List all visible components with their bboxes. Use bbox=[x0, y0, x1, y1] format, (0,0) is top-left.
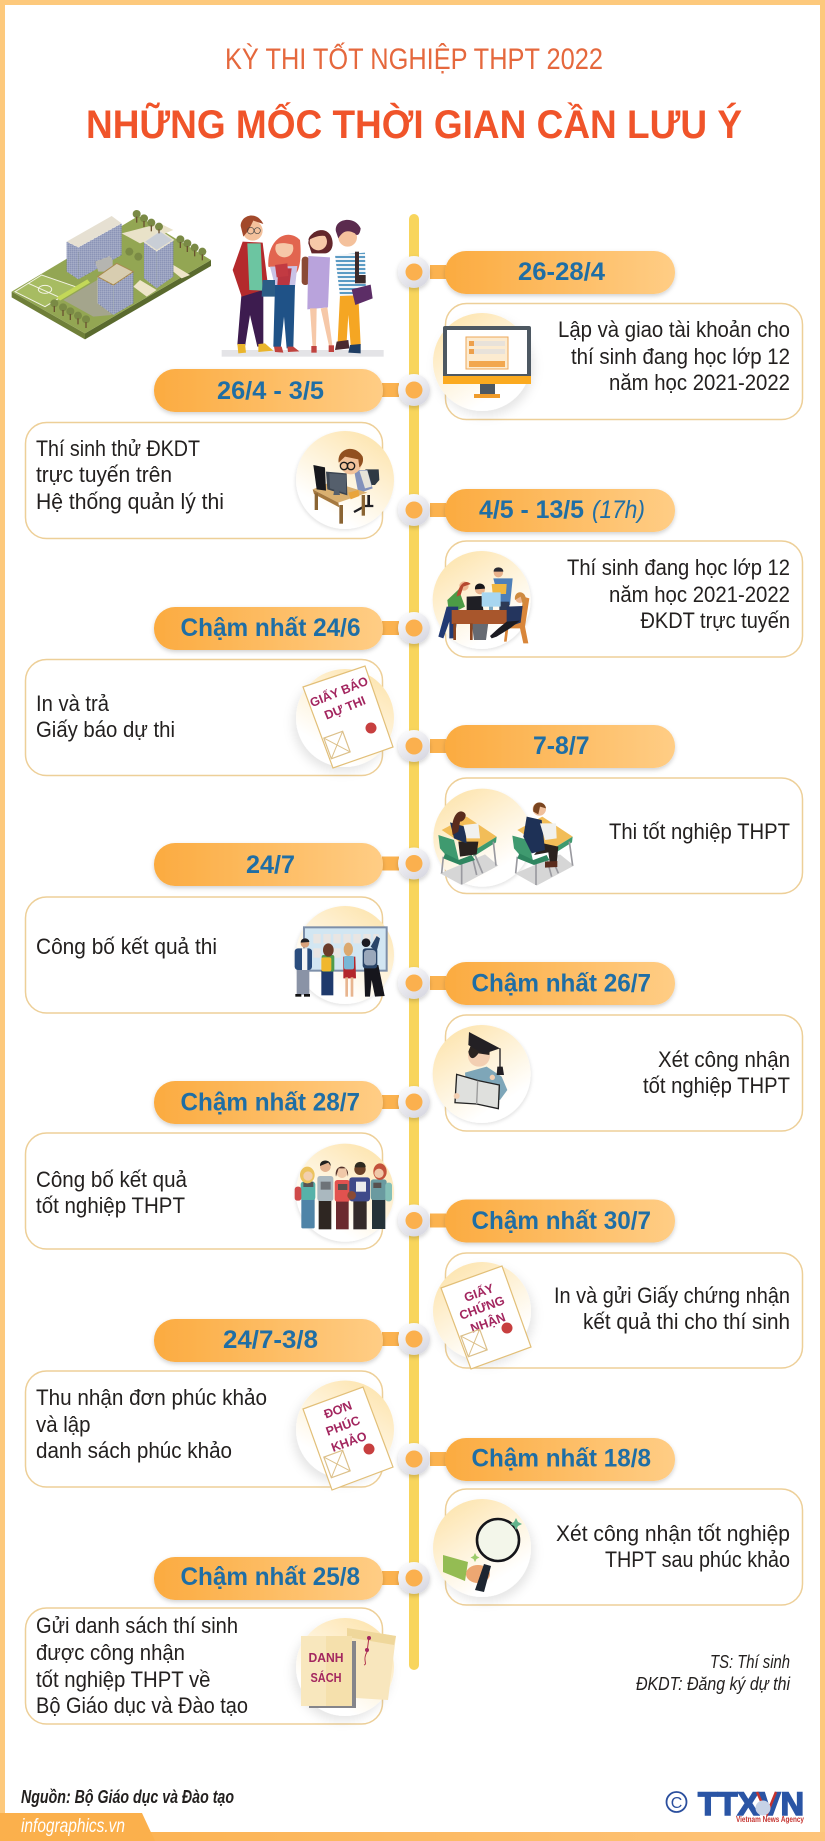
date pill: Chậm nhất 25/8 bbox=[180, 1563, 360, 1591]
card text bbox=[36, 1385, 267, 1463]
bottom band with site tab bbox=[0, 1813, 825, 1841]
card text: được công nhận bbox=[36, 1640, 185, 1665]
milestone 9: Chậm nhất 30/7 bbox=[430, 1200, 802, 1369]
person two bbox=[321, 943, 334, 995]
date pill: (17h) bbox=[592, 496, 645, 524]
card text: tốt nghiệp THPT về bbox=[36, 1667, 210, 1692]
icon: students taking exam bbox=[433, 789, 574, 887]
card text: In và gửi Giấy chứng nhận bbox=[554, 1283, 790, 1308]
card text: Thí sinh thử ĐKDT bbox=[36, 436, 200, 461]
date pill: 26-28/4 bbox=[518, 258, 605, 286]
logo: TTXVN: C bbox=[671, 1795, 682, 1812]
card bbox=[433, 1489, 802, 1605]
icon: group at table bbox=[433, 551, 531, 649]
date pill: Chậm nhất 28/7 bbox=[180, 1088, 360, 1116]
icon: results board bbox=[295, 906, 394, 1004]
card text: tốt nghiệp THPT bbox=[643, 1073, 790, 1098]
icon: five students bbox=[295, 1144, 394, 1242]
date pill bbox=[430, 1200, 675, 1242]
bottom band with site tab: infographics.vn bbox=[21, 1816, 125, 1837]
icon: certificate paper: NHẬN bbox=[468, 1309, 507, 1336]
card text: Thu nhận đơn phúc khảo bbox=[36, 1385, 267, 1410]
card bbox=[433, 1015, 802, 1131]
card text bbox=[36, 1167, 187, 1218]
icon: certificate paper bbox=[433, 1262, 531, 1369]
date pill: 4/5 - 13/5 bbox=[479, 496, 584, 524]
card bbox=[26, 897, 394, 1013]
card bbox=[433, 541, 802, 657]
icon: review request paper: ĐƠN bbox=[322, 1399, 354, 1421]
card text bbox=[36, 691, 175, 742]
card text: Công bố kết quả bbox=[36, 1167, 187, 1192]
card text bbox=[558, 317, 790, 395]
card bbox=[26, 1133, 394, 1249]
card text: Hệ thống quản lý thi bbox=[36, 489, 224, 514]
icon: list folder: DANH bbox=[308, 1651, 344, 1665]
icon: exam notice paper: DỰ THI bbox=[322, 693, 368, 723]
milestone 12: Chậm nhất 25/8 bbox=[26, 1557, 399, 1724]
date pill bbox=[154, 1081, 399, 1124]
abbreviations note bbox=[636, 1652, 791, 1694]
timeline nodes bbox=[398, 256, 430, 1594]
student c bbox=[335, 1167, 350, 1229]
card text: năm học 2021-2022 bbox=[609, 582, 790, 607]
card text: Xét công nhận bbox=[658, 1047, 790, 1072]
milestone 1: 26-28/4 bbox=[430, 251, 802, 420]
card text: In và trả bbox=[36, 691, 109, 716]
icon: computer login bbox=[433, 313, 531, 411]
icon: magnifying glass bbox=[433, 1499, 531, 1597]
card bbox=[26, 422, 394, 538]
card bbox=[26, 1371, 394, 1490]
icon: list folder: SÁCH bbox=[310, 1670, 342, 1685]
milestone 5: 7-8/7 bbox=[430, 725, 802, 894]
milestone 11: Chậm nhất 18/8 bbox=[430, 1438, 802, 1605]
card text: tốt nghiệp THPT bbox=[36, 1193, 185, 1218]
icon: graduate with book bbox=[433, 1025, 531, 1123]
date pill: 26/4 - 3/5 bbox=[217, 377, 324, 405]
abbreviations note: TS: Thí sinh bbox=[710, 1652, 790, 1672]
card text: Bộ Giáo dục và Đào tạo bbox=[36, 1693, 248, 1718]
illustration: four students bbox=[222, 215, 384, 357]
card text bbox=[556, 1521, 790, 1572]
icon: review request paper: KHẢO bbox=[329, 1428, 369, 1455]
milestone 2: 26/4 - 3/5 bbox=[26, 369, 399, 538]
card text: Thi tốt nghiệp THPT bbox=[609, 819, 790, 844]
card text: Thí sinh đang học lớp 12 bbox=[567, 555, 790, 580]
logo: TTXVN: TTXVN bbox=[698, 1786, 804, 1822]
date pill bbox=[154, 369, 399, 412]
student in lavender dress bbox=[302, 230, 334, 353]
date pill: 24/7-3/8 bbox=[223, 1326, 318, 1354]
card text bbox=[554, 1283, 790, 1334]
milestone 4: Chậm nhất 24/6 bbox=[26, 607, 399, 776]
date pill bbox=[154, 607, 399, 650]
milestone 6: 24/7 bbox=[26, 843, 399, 1013]
student e bbox=[371, 1163, 392, 1229]
illustration: isometric school bbox=[12, 210, 211, 339]
milestone 7: Chậm nhất 26/7 bbox=[430, 962, 802, 1131]
person four bbox=[362, 936, 385, 997]
student d bbox=[347, 1162, 370, 1229]
student a bbox=[295, 1167, 315, 1228]
student with red hair bbox=[262, 235, 301, 353]
date pill bbox=[430, 962, 675, 1005]
date pill bbox=[430, 725, 675, 768]
milestone 3: 4/5 - 13/5 bbox=[430, 489, 802, 657]
card bbox=[433, 778, 802, 894]
card text bbox=[567, 555, 790, 633]
card bbox=[26, 660, 394, 776]
timeline axis bbox=[409, 214, 419, 1670]
icon: review request paper: PHÚC bbox=[324, 1412, 362, 1439]
milestone 8: Chậm nhất 28/7 bbox=[26, 1081, 399, 1249]
logo: TTXVN: Vietnam News Agency bbox=[736, 1815, 804, 1824]
card text: ĐKDT trực tuyến bbox=[640, 608, 790, 633]
icon: exam notice paper bbox=[296, 666, 394, 768]
source: Nguồn: Bộ Giáo dục và Đào tạo bbox=[21, 1787, 234, 1807]
date pill: Chậm nhất 30/7 bbox=[472, 1207, 651, 1235]
date pill: Chậm nhất 26/7 bbox=[472, 970, 651, 998]
card text: Gửi danh sách thí sinh bbox=[36, 1613, 238, 1638]
student with red jacket bbox=[233, 215, 273, 353]
person three bbox=[343, 943, 356, 997]
card text: kết quả thi cho thí sinh bbox=[583, 1309, 790, 1334]
person one bbox=[295, 938, 312, 997]
card bbox=[26, 1608, 396, 1724]
main heading: NHỮNG MỐC THỜI GIAN CẦN LƯU Ý bbox=[86, 101, 742, 147]
card text: Xét công nhận tốt nghiệp bbox=[556, 1521, 790, 1546]
card text: trực tuyến trên bbox=[36, 462, 172, 487]
card text: và lập bbox=[36, 1412, 90, 1437]
date pill bbox=[430, 251, 675, 294]
date pill bbox=[154, 1557, 399, 1600]
card text: Lập và giao tài khoản cho bbox=[558, 317, 790, 342]
icon: review request paper bbox=[296, 1380, 394, 1490]
milestone 10: 24/7-3/8 bbox=[26, 1319, 399, 1490]
icon: exam notice paper: GIẤY BÁO bbox=[307, 673, 370, 710]
desk one bbox=[438, 811, 498, 885]
icon: list folder bbox=[296, 1618, 396, 1716]
date pill bbox=[430, 1438, 675, 1481]
card text: THPT sau phúc khảo bbox=[605, 1547, 790, 1572]
card text: thí sinh đang học lớp 12 bbox=[571, 344, 790, 369]
card text: Giấy báo dự thi bbox=[36, 717, 175, 742]
card text bbox=[36, 436, 224, 514]
desk two bbox=[512, 802, 574, 886]
student b bbox=[317, 1160, 333, 1229]
icon: certificate paper: GIẤY bbox=[462, 1280, 496, 1305]
card text bbox=[36, 1613, 248, 1718]
date pill: 7-8/7 bbox=[533, 732, 590, 760]
icon: student at computer bbox=[296, 431, 394, 529]
date pill: Chậm nhất 18/8 bbox=[472, 1444, 651, 1472]
date pill bbox=[430, 489, 675, 532]
icon: certificate paper: CHỨNG bbox=[457, 1292, 507, 1323]
card text: Công bố kết quả thi bbox=[36, 934, 217, 959]
card text: danh sách phúc khảo bbox=[36, 1438, 232, 1463]
date pill: 24/7 bbox=[246, 851, 295, 879]
abbreviations note: ĐKDT: Đăng ký dự thi bbox=[636, 1674, 791, 1694]
card bbox=[433, 304, 802, 420]
date pill bbox=[154, 1319, 399, 1362]
card bbox=[433, 1253, 802, 1369]
card text: năm học 2021-2022 bbox=[609, 370, 790, 395]
card text bbox=[643, 1047, 790, 1098]
date pill bbox=[154, 843, 399, 886]
date pill: Chậm nhất 24/6 bbox=[180, 614, 360, 642]
student with striped shirt bbox=[335, 220, 373, 353]
title line 1: KỲ THI TỐT NGHIỆP THPT 2022 bbox=[225, 42, 603, 76]
